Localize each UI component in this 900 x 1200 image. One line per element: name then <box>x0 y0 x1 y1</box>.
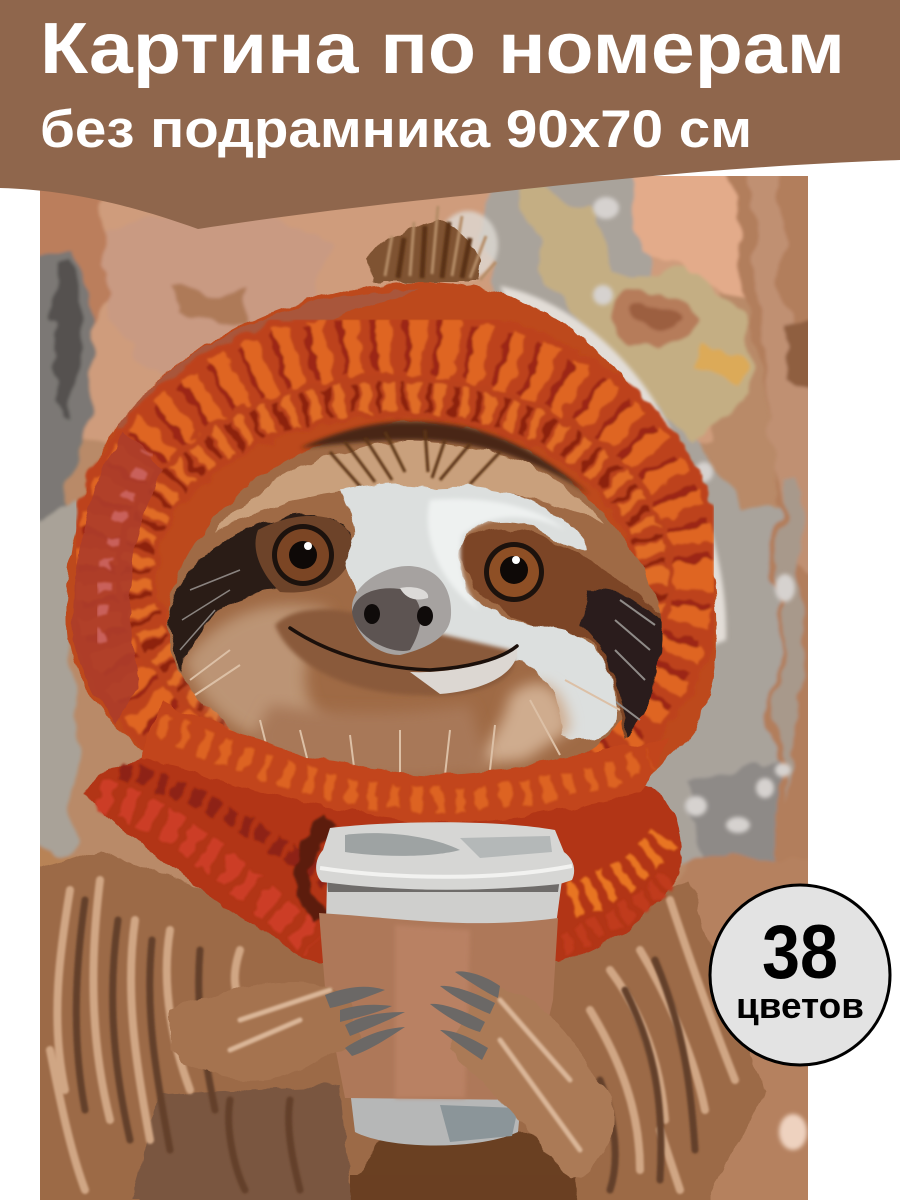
dark edge around face <box>300 422 590 495</box>
left eye <box>272 524 334 586</box>
white face mask <box>340 484 616 742</box>
panel: painting of a sloth in a knitted hat holding a coffee cup <box>40 176 808 1200</box>
red scarf <box>85 700 682 965</box>
white fuzz on the hat edge <box>500 286 726 650</box>
forehead fur <box>215 440 605 530</box>
cup upper body <box>326 880 562 925</box>
nose <box>352 566 451 655</box>
cardboard sleeve <box>319 913 558 1100</box>
hat upper-left shaded fold <box>117 288 418 430</box>
sloth paws with claws <box>170 971 613 1180</box>
left cheek <box>185 605 340 735</box>
badge number: 38 <box>762 910 838 995</box>
cup lid <box>316 822 574 890</box>
subtitle: без подрамника 90х70 см <box>40 100 752 159</box>
hat ribbing <box>105 343 685 807</box>
cup bottom <box>351 1098 520 1146</box>
muzzle <box>275 609 514 696</box>
painting background <box>40 176 808 1200</box>
fur body <box>0 850 765 1200</box>
knitted orange hat and hood <box>65 282 726 807</box>
pompom <box>366 206 498 282</box>
dark eye stripes <box>168 515 352 670</box>
chin fur <box>250 705 490 778</box>
title: Картина по номерам <box>40 9 845 89</box>
right cheek <box>470 683 570 765</box>
snowflakes <box>593 197 807 1150</box>
badge: 38 colours <box>710 885 890 1065</box>
sloth face <box>168 422 662 778</box>
smile <box>290 628 517 670</box>
right eye <box>484 542 544 602</box>
red left side of the hood <box>72 430 165 725</box>
banner background <box>0 0 900 229</box>
coffee cup <box>316 822 574 1146</box>
badge label: цветов <box>736 985 864 1026</box>
